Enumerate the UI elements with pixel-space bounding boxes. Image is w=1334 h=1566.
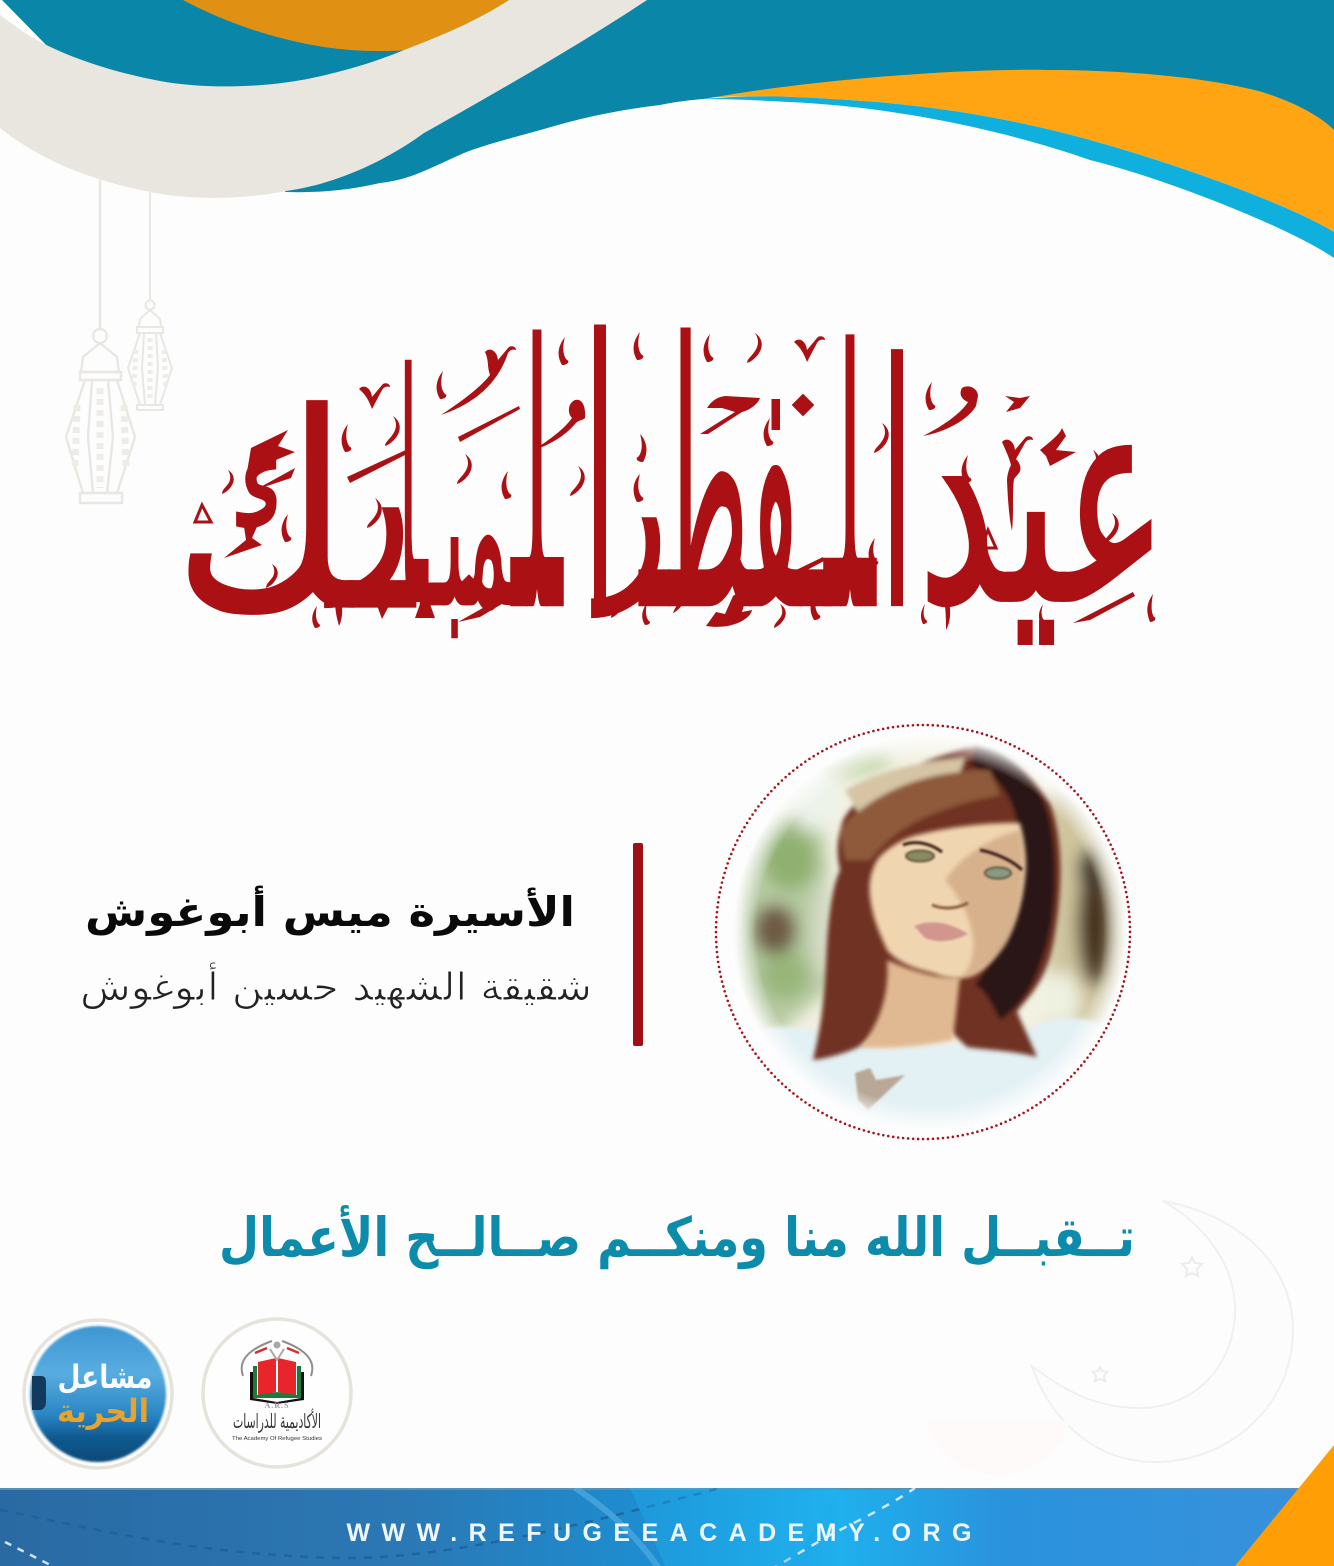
website url: WWW.REFUGEEACADEMY.ORG bbox=[346, 1519, 972, 1547]
footer bar bbox=[0, 1488, 1334, 1566]
neck bbox=[860, 960, 960, 1048]
orange corner triangle bbox=[1235, 1445, 1334, 1566]
logo: freedom torches: مشاعل bbox=[58, 1358, 152, 1396]
blessing line: تــقبــل الله منا ومنكــم صــالــح الأعمال bbox=[219, 1205, 1135, 1269]
logo: academy of refugee studies: A.R.S bbox=[264, 1401, 290, 1410]
red vertical divider bbox=[633, 843, 643, 1046]
word: mubarak: ا bbox=[589, 266, 611, 691]
faint pink shape bbox=[926, 1421, 1070, 1475]
facial features bbox=[903, 843, 1022, 941]
decorative dashes and arcs bbox=[0, 1488, 915, 1566]
word: fitr: ـلـ bbox=[823, 278, 877, 688]
crescent moon with stars bbox=[1032, 1201, 1293, 1462]
large lantern bbox=[66, 180, 135, 503]
calligraphic ornaments bbox=[204, 332, 1155, 630]
word: fitr: ا bbox=[886, 296, 908, 683]
collar bbox=[855, 1068, 905, 1110]
shirt bbox=[765, 1016, 1099, 1118]
logo: academy of refugee studies: The Academy Of Refugee Studies bbox=[232, 1436, 322, 1442]
word: mubarak: ـمبـ bbox=[420, 398, 534, 658]
logo: academy of refugee studies: الأكاديمية للدراسات bbox=[233, 1409, 321, 1433]
logo: freedom torches bbox=[24, 1320, 172, 1468]
word: mubarak: ـا bbox=[402, 311, 428, 675]
hair back bbox=[813, 745, 1060, 1060]
top wave header bbox=[0, 0, 1334, 258]
portrait photo in dotted circle bbox=[716, 725, 1130, 1140]
open book emblem bbox=[242, 1341, 312, 1404]
dotted ring bbox=[716, 725, 1130, 1139]
photo bbox=[730, 730, 1130, 1140]
ornament dots bbox=[195, 394, 996, 618]
word: fitr: ـفطـ bbox=[638, 269, 832, 689]
small lantern bbox=[128, 190, 172, 410]
name: prisoner: الأسيرة ميس أبوغوش bbox=[85, 885, 575, 936]
word: mubarak bbox=[175, 266, 611, 691]
hanging lanterns bbox=[66, 180, 172, 503]
greeting calligraphy title bbox=[175, 266, 1168, 691]
word: mubarak: ـك bbox=[175, 357, 415, 670]
word: mubarak: ر bbox=[325, 383, 412, 607]
logo: academy of refugee studies bbox=[203, 1319, 351, 1467]
word: fitr: ر bbox=[592, 393, 668, 617]
word: mubarak: ـلـ bbox=[510, 272, 564, 689]
face bbox=[869, 823, 1026, 978]
word: eid: عيد bbox=[918, 326, 1168, 670]
logo: freedom torches: الحرية bbox=[57, 1392, 149, 1430]
subtitle: sister of martyr: شقيقة الشهيد حسين أبوغوش bbox=[80, 962, 592, 1010]
